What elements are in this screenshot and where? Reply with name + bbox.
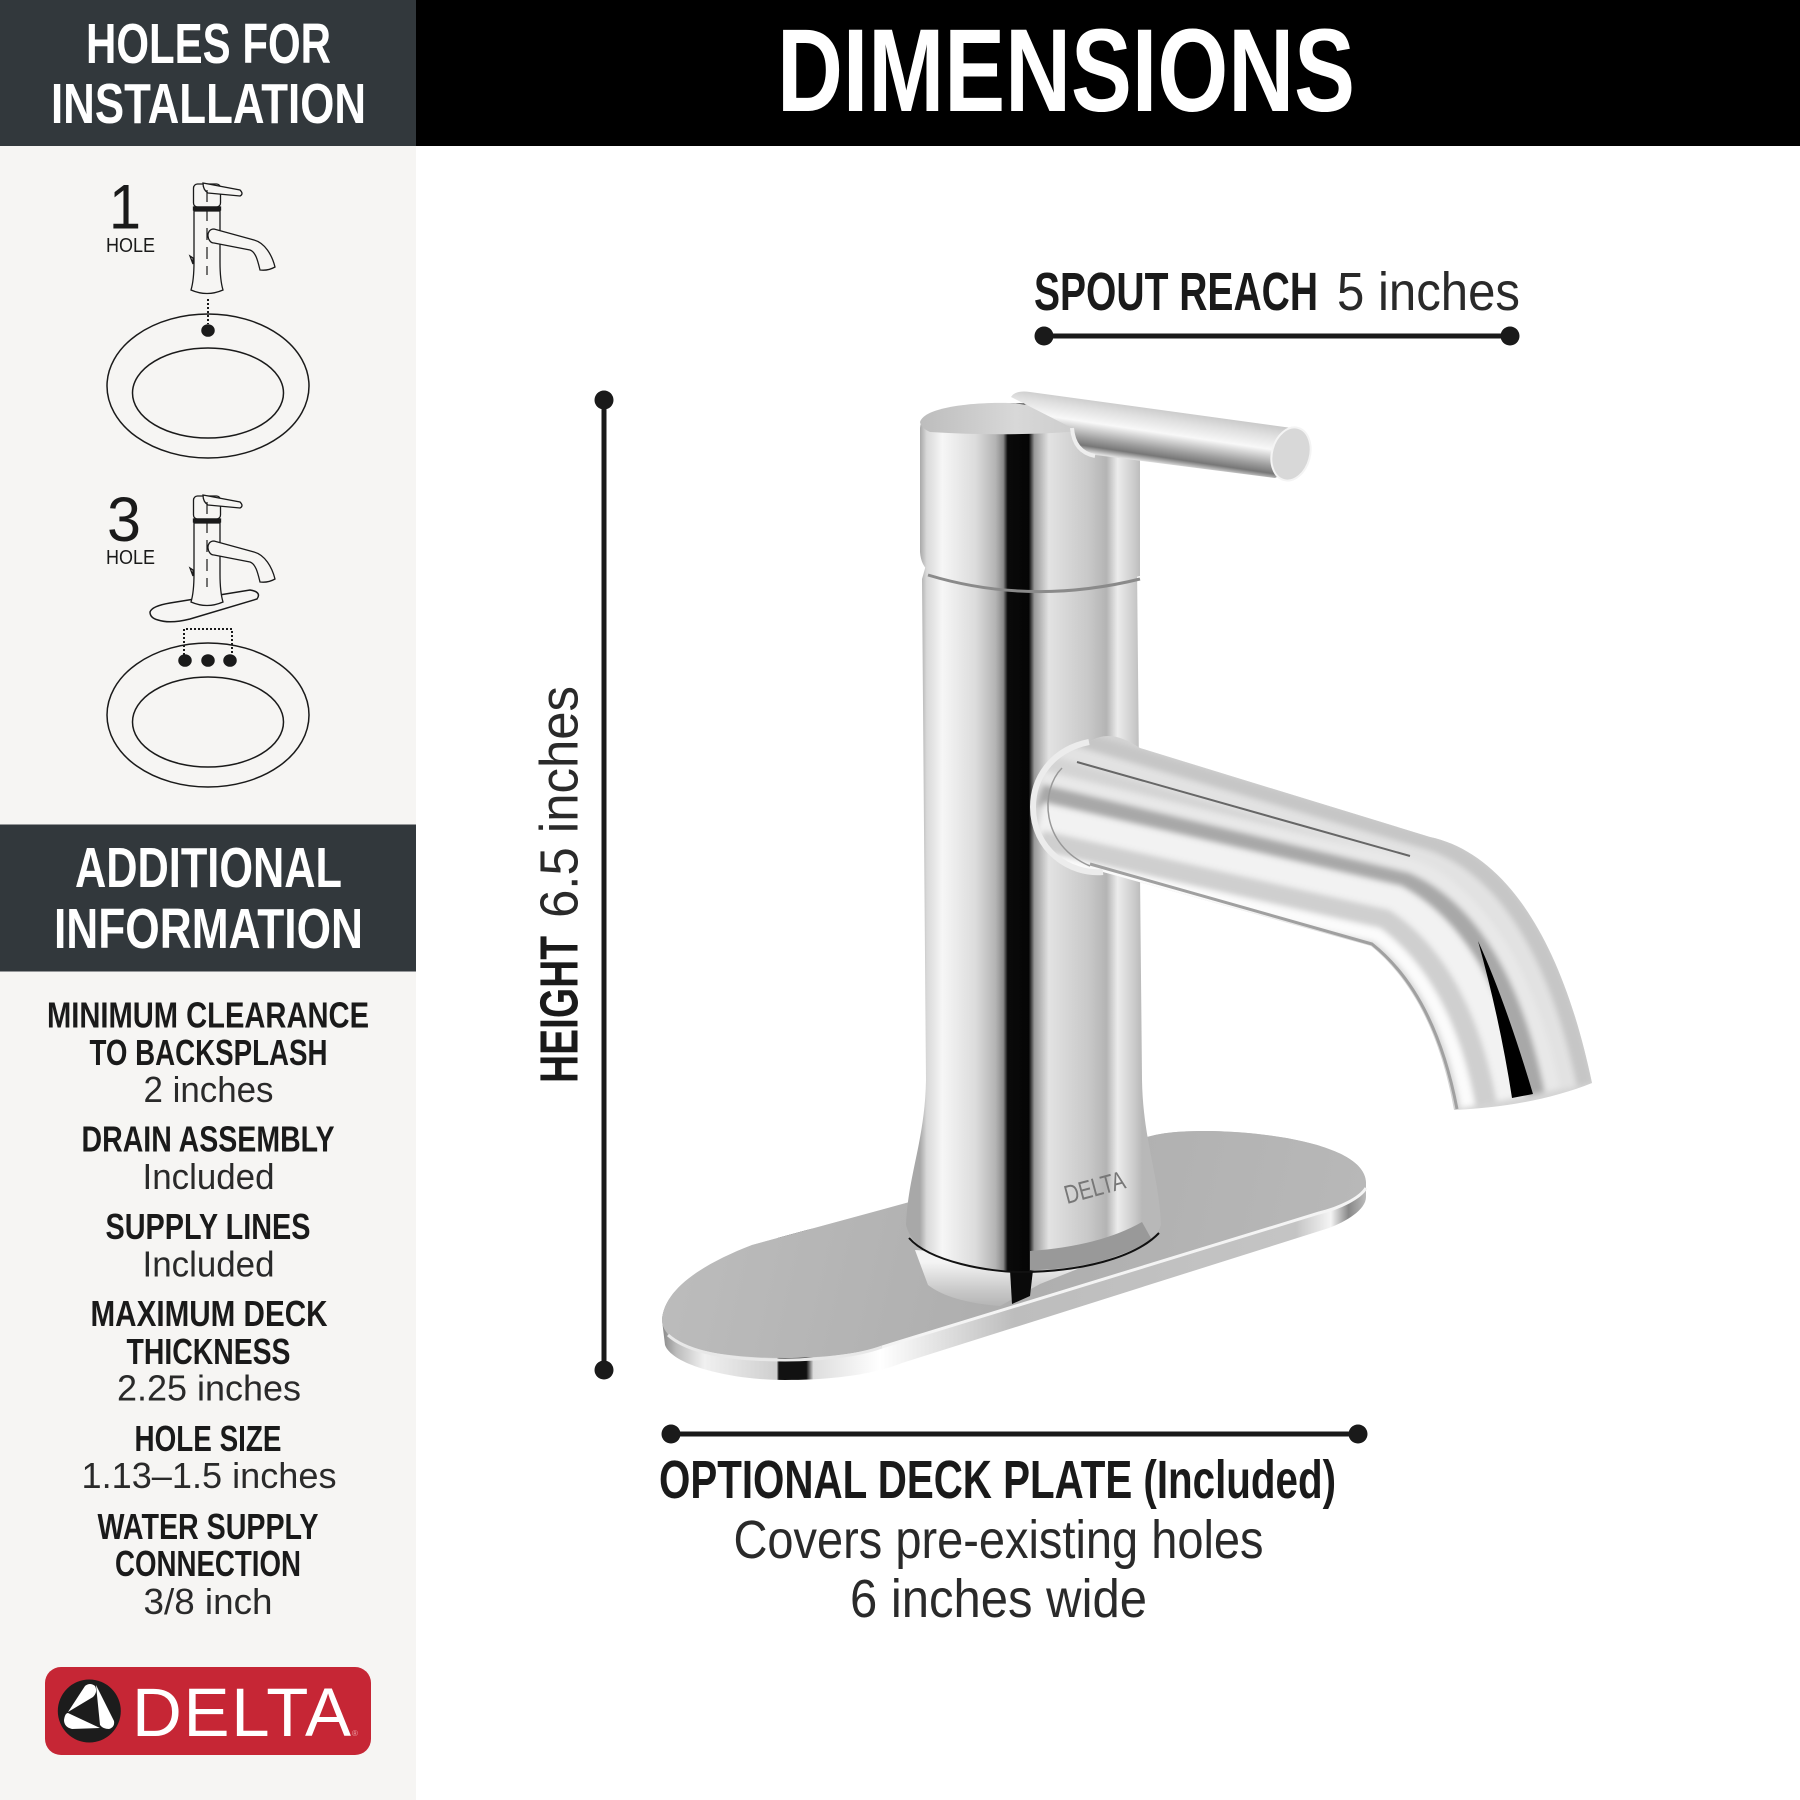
faucet cap xyxy=(920,403,1140,588)
faucet body xyxy=(906,565,1161,1272)
diagram: 3 hole installation xyxy=(106,485,309,787)
spec: water supply connection xyxy=(98,1506,318,1622)
chart: spout reach dimension: SPOUT REACH xyxy=(1034,262,1318,322)
text block: deck plate description: 6 inches wide xyxy=(850,1569,1147,1629)
collar xyxy=(1033,742,1103,872)
logo on base: DELTA xyxy=(1061,1165,1129,1210)
spec: maximum deck thickness xyxy=(90,1293,328,1408)
panel: additional information header: INFORMATION xyxy=(54,897,363,961)
logo: delta xyxy=(45,1667,371,1755)
chart: height dimension: HEIGHT xyxy=(530,936,590,1083)
spec: supply lines xyxy=(106,1206,310,1284)
deck plate xyxy=(662,1131,1366,1380)
label: 3 hole: HOLE xyxy=(106,547,155,569)
panel: left sidebar xyxy=(0,146,416,1800)
spec: water supply connection: WATER SUPPLY xyxy=(98,1506,318,1547)
spec: drain assembly xyxy=(82,1118,334,1197)
spec: water supply connection: CONNECTION xyxy=(115,1543,301,1584)
panel: additional information header xyxy=(0,824,416,972)
icon: small faucet with plate xyxy=(190,495,275,606)
spec: hole size: HOLE SIZE xyxy=(134,1418,282,1459)
label: 3 hole: 3 xyxy=(107,485,141,555)
spout xyxy=(1033,731,1592,1110)
icon: sink with one hole xyxy=(107,314,309,458)
spec: drain assembly: Included xyxy=(142,1156,274,1197)
title: dimensions: DIMENSIONS xyxy=(777,5,1355,137)
spec: maximum deck thickness: 2.25 inches xyxy=(117,1368,301,1408)
base shading xyxy=(1030,1222,1152,1270)
diagram: 1 hole installation xyxy=(106,172,309,458)
label: 1 hole xyxy=(106,172,155,257)
handle xyxy=(1011,392,1316,485)
spec: minimum clearance: MINIMUM CLEARANCE xyxy=(47,994,369,1036)
dotted guide xyxy=(207,299,209,324)
cartridge seam xyxy=(928,575,1140,592)
logo: delta: DELTA xyxy=(132,1674,351,1751)
text block: deck plate description: OPTIONAL DECK PLATE (Included) xyxy=(659,1450,1336,1510)
panel: holes for installation header: INSTALLATION xyxy=(51,72,366,136)
spec: minimum clearance xyxy=(47,994,369,1110)
label: 1 hole: HOLE xyxy=(106,235,155,257)
chart: spout reach dimension: 5 inches xyxy=(1337,262,1520,322)
chart: deck plate dimension xyxy=(659,1424,1368,1629)
label: 1 hole: 1 xyxy=(109,172,141,242)
spec: maximum deck thickness: THICKNESS xyxy=(126,1331,290,1372)
arrow: height line xyxy=(594,390,614,1380)
spec: supply lines: SUPPLY LINES xyxy=(106,1206,310,1247)
spec: hole size: 1.13–1.5 inches xyxy=(82,1455,336,1496)
chart: spout reach dimension xyxy=(1034,262,1520,346)
spec: minimum clearance: TO BACKSPLASH xyxy=(90,1032,328,1073)
panel: dimensions header bar xyxy=(416,0,1800,146)
chart: height dimension: 6.5 inches xyxy=(530,686,590,918)
spec: supply lines: Included xyxy=(142,1244,274,1284)
icon: delta triangle mark xyxy=(58,1680,121,1742)
spec: drain assembly: DRAIN ASSEMBLY xyxy=(82,1118,334,1160)
spec: maximum deck thickness: MAXIMUM DECK xyxy=(90,1293,328,1334)
logo: delta: ® xyxy=(352,1729,358,1738)
spec: minimum clearance: 2 inches xyxy=(144,1069,274,1110)
panel: holes for installation header: HOLES FOR xyxy=(86,12,331,76)
icon: deck plate xyxy=(150,590,258,622)
cap top xyxy=(920,403,1110,434)
spec: hole size xyxy=(82,1418,336,1496)
illustration: chrome faucet xyxy=(662,392,1592,1380)
arrow: spout reach line xyxy=(1034,326,1520,346)
dotted guide bracket xyxy=(184,629,232,655)
text block: deck plate description: Covers pre-existing holes xyxy=(734,1510,1264,1570)
panel: additional information header: ADDITIONAL xyxy=(75,836,342,900)
icon: small faucet xyxy=(190,183,275,294)
text block: deck plate description xyxy=(659,1450,1336,1629)
arrow: deck plate line xyxy=(662,1424,1368,1444)
faucet reflection on plate xyxy=(915,1250,1095,1306)
label: 3 hole xyxy=(106,485,155,569)
spec: water supply connection: 3/8 inch xyxy=(144,1581,272,1622)
text block: additional information specs xyxy=(47,994,369,1622)
panel: holes for installation header xyxy=(0,0,416,146)
chart: height dimension xyxy=(530,390,614,1380)
icon: sink with three holes xyxy=(107,643,309,787)
